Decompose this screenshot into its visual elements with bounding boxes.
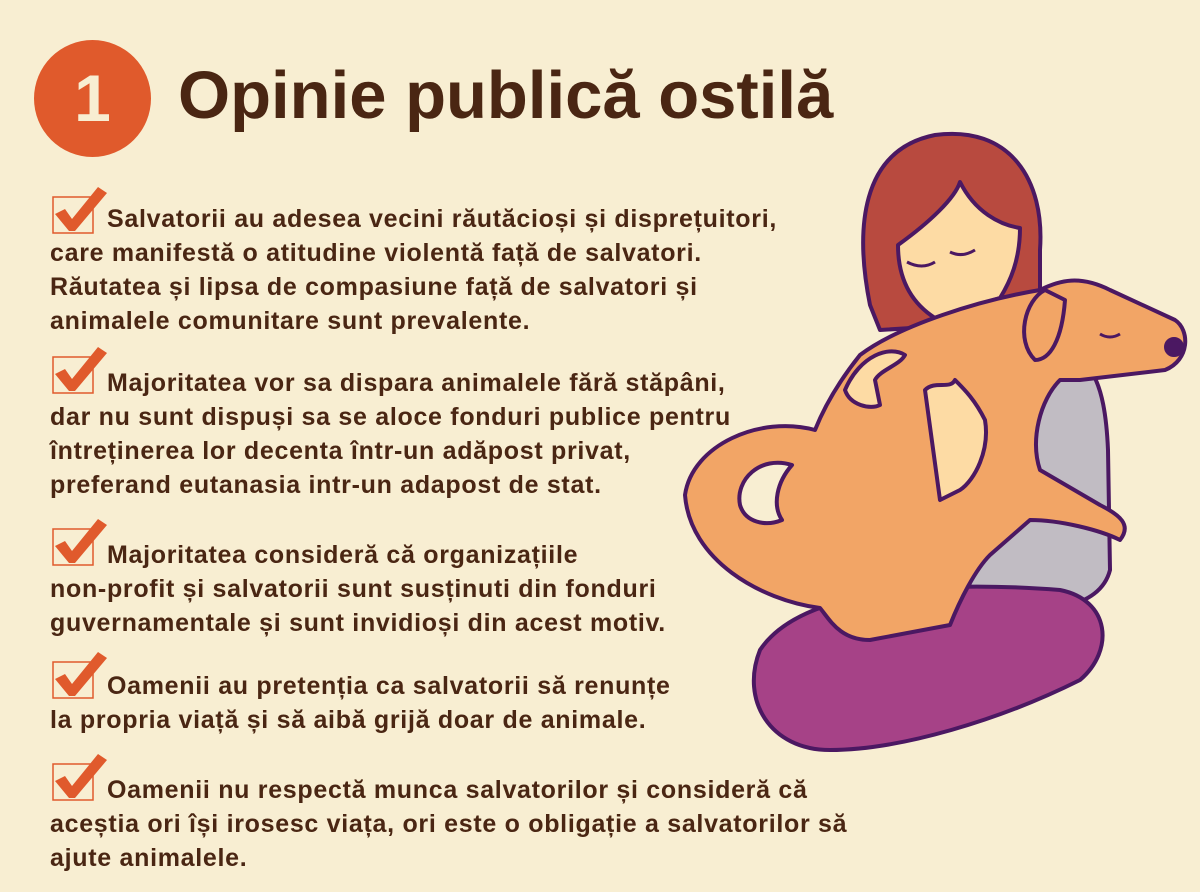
item 2: întreținerea lor decenta într-un adăpost privat, — [50, 437, 631, 465]
item 3: guvernamentale și sunt invidioși din acest motiv. — [50, 609, 666, 637]
item 3 — [50, 519, 666, 637]
title: Opinie publică ostilă — [178, 58, 833, 133]
item 5: Oamenii nu respectă munca salvatorilor și consideră că — [107, 776, 808, 804]
icon: checkbox — [52, 347, 107, 394]
icon: checkbox — [52, 187, 107, 234]
item 4 — [50, 652, 671, 734]
hair — [863, 134, 1040, 330]
item 5: aceștia ori își irosesc viața, ori este o obligație a salvatorilor să — [50, 810, 847, 838]
item 2: preferand eutanasia intr-un adapost de stat. — [50, 471, 602, 499]
closed eyes — [907, 250, 1120, 337]
item 1 — [50, 187, 777, 335]
item 3: non-profit și salvatorii sunt susținuti din fonduri — [50, 575, 657, 603]
item 4: Oamenii au pretenția ca salvatorii să renunțe — [107, 672, 671, 700]
number badge: 1 — [74, 61, 111, 135]
icon: checkbox — [52, 754, 107, 801]
item 4: la propria viață și să aibă grijă doar de animale. — [50, 706, 646, 734]
purple legs — [754, 587, 1103, 750]
hands — [845, 351, 905, 407]
item 5: ajute animalele. — [50, 844, 247, 872]
dog nose — [1166, 339, 1182, 355]
icon: checkbox — [52, 652, 107, 699]
face — [898, 182, 1020, 318]
item 1: Salvatorii au adesea vecini răutăcioși și disprețuitori, — [107, 205, 777, 233]
item 5 — [50, 754, 847, 872]
item 3: Majoritatea consideră că organizațiile — [107, 541, 578, 569]
item 1: Răutatea și lipsa de compasiune față de salvatori și — [50, 273, 698, 301]
icon: checkbox — [52, 519, 107, 566]
item 2: Majoritatea vor sa dispara animalele fără stăpâni, — [107, 369, 726, 397]
item 2 — [49, 347, 731, 499]
dog body + tail — [685, 281, 1185, 640]
number badge — [34, 40, 151, 157]
tail gap — [739, 463, 792, 523]
item 2: dar nu sunt dispuși sa se aloce fonduri publice pentru — [50, 403, 731, 431]
item 1: animalele comunitare sunt prevalente. — [50, 307, 530, 335]
grey torso — [944, 350, 1110, 608]
dog ear — [1024, 290, 1065, 360]
item 1: care manifestă o atitudine violentă față de salvatori. — [50, 239, 702, 267]
